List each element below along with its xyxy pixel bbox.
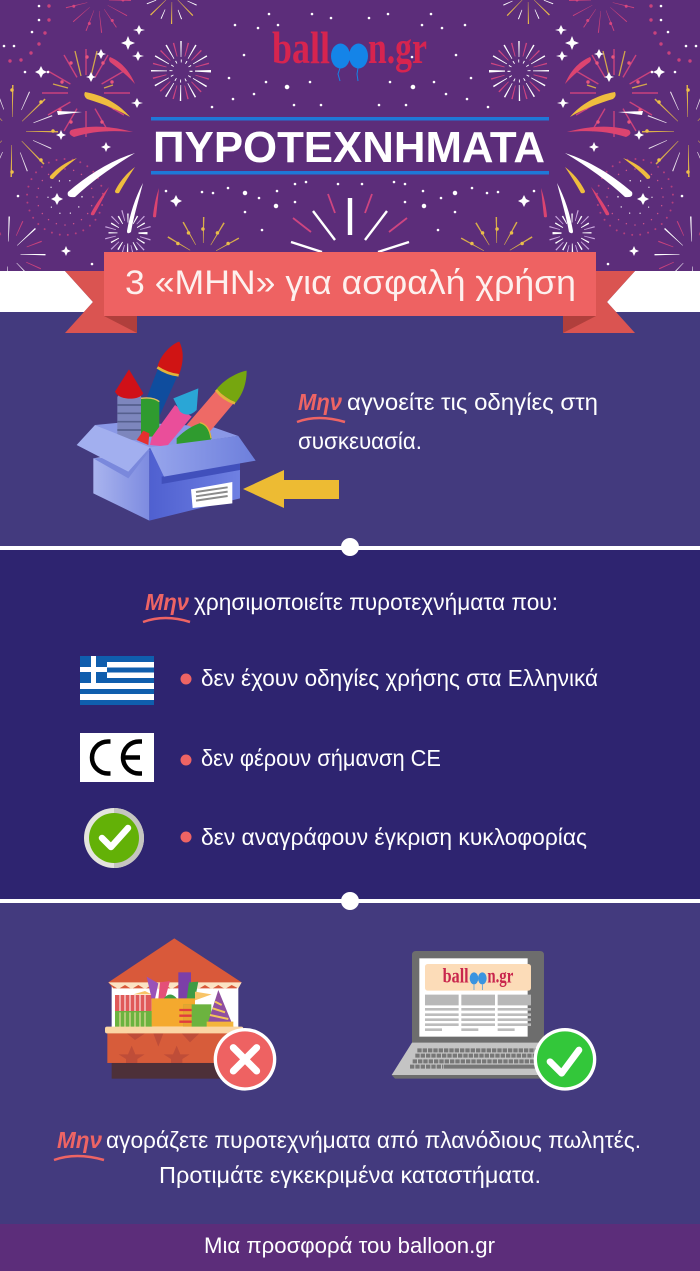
pink rocket (150, 405, 192, 447)
illustration: laptop: ball (443, 966, 469, 988)
icon: greek flag (80, 656, 154, 705)
white band left (0, 271, 93, 312)
heading: do not use: Μην (145, 589, 189, 615)
underline (54, 1156, 104, 1160)
green cylinder (141, 398, 159, 437)
fireworks decoration (0, 0, 700, 287)
no badge (214, 1028, 276, 1091)
title: ΠΥΡΟΤΕΧΝΗΜΑΤΑ (153, 123, 545, 172)
icon: balloons (331, 44, 368, 81)
illustration: laptop (392, 951, 596, 1091)
box right wall (149, 448, 240, 521)
yes badge (534, 1028, 596, 1091)
heading: do not use: χρησιμοποιείτε πυροτεχνήματα που: (194, 589, 558, 615)
text block: vendors: Προτιμάτε εγκεκριμένα καταστήματα. (159, 1162, 541, 1188)
text block: packaging (297, 389, 598, 454)
grey rocket (117, 395, 141, 440)
heading: do not use (143, 589, 558, 622)
illustration: street stall (105, 938, 276, 1091)
box interior (95, 422, 238, 448)
section three background (0, 901, 700, 1224)
logo: n.gr (368, 22, 427, 73)
blue rocket (143, 366, 179, 415)
white band right (607, 271, 700, 312)
icon: approval check (84, 808, 144, 868)
text block: packaging: Μην (298, 389, 342, 415)
label (191, 482, 232, 508)
small green (177, 423, 212, 445)
coral rocket (187, 390, 235, 433)
section one background (0, 312, 700, 548)
text block: vendors: αγοράζετε πυροτεχνήματα από πλανόδιους πωλητές. (106, 1127, 641, 1153)
divider one (0, 538, 700, 556)
underline (297, 418, 345, 422)
text block: packaging: συσκευασία. (298, 428, 422, 454)
bullet text one: δεν έχουν οδηγίες χρήσης στα Ελληνικά (201, 665, 598, 691)
illustration: laptop: n.gr (487, 966, 513, 988)
illustration: firework box (77, 342, 256, 521)
logo: ball (272, 22, 330, 73)
left flap (77, 425, 150, 472)
text block: vendors: Μην (57, 1127, 102, 1153)
right flap (150, 436, 256, 477)
wall shadow (93, 450, 150, 478)
ribbon banner (65, 252, 635, 333)
logo (272, 22, 427, 81)
divider two (0, 892, 700, 910)
header background (0, 0, 700, 272)
section two background (0, 548, 700, 901)
text block: vendors (54, 1127, 641, 1188)
arrow (243, 470, 339, 508)
ribbon banner: 3 «ΜΗΝ» για ασφαλή χρήση (125, 264, 576, 302)
underline (143, 618, 190, 622)
icon: CE mark (80, 733, 154, 782)
text block: packaging: αγνοείτε τις οδηγίες στη (347, 389, 598, 415)
bullet text three: δεν αναγράφουν έγκριση κυκλοφορίας (201, 824, 587, 850)
box left wall (93, 448, 149, 521)
footer: Μια προσφορά του balloon.gr (204, 1233, 495, 1258)
bullet text two: δεν φέρουν σήμανση CE (201, 745, 441, 771)
footer (0, 1224, 700, 1271)
